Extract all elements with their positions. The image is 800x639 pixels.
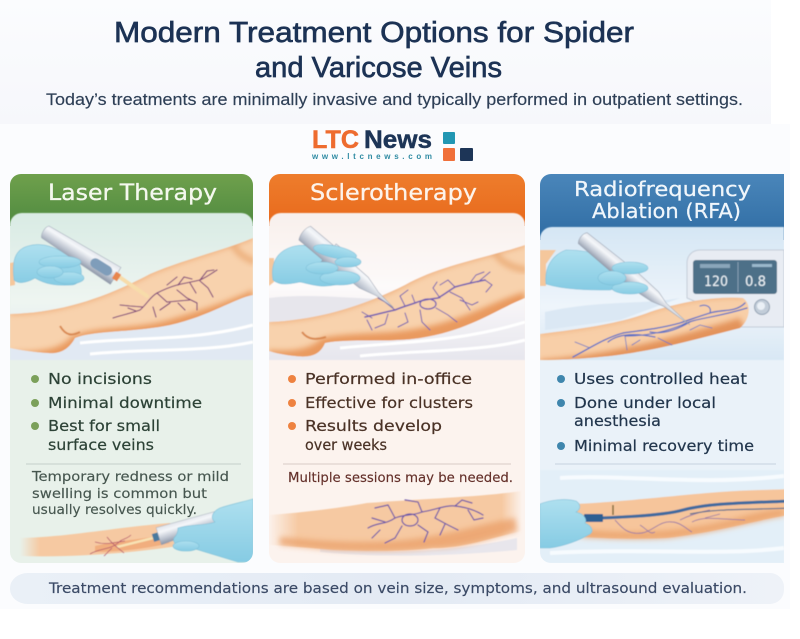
finger lobes bbox=[306, 242, 361, 285]
bullet list bbox=[31, 370, 202, 454]
subtitle: Today’s treatments are minimally invasive and typically performed in outpatient settings. bbox=[46, 91, 743, 109]
illustration: treated leg close-up bbox=[268, 491, 522, 556]
header: Radiofrequency Ablation (RFA) bbox=[540, 174, 784, 240]
syringe bbox=[298, 226, 394, 308]
header: Sclerotherapy bbox=[269, 174, 525, 226]
footer banner bbox=[10, 573, 784, 604]
bullet list bbox=[288, 370, 473, 454]
illustration: catheter in arm bbox=[540, 474, 784, 557]
title: and Varicose Veins bbox=[255, 52, 502, 84]
veins bbox=[573, 303, 747, 357]
RFA machine: 0.8 bbox=[745, 274, 766, 290]
panel: Radiofrequency Ablation (RFA) bbox=[540, 174, 790, 563]
laser beam bbox=[118, 276, 147, 296]
logo: LTC News: News bbox=[364, 126, 432, 154]
leg bbox=[10, 238, 253, 354]
illustration: injection on leg bbox=[269, 213, 528, 360]
footer banner: Treatment recommendations are based on vein size, symptoms, and ultrasound evaluation. bbox=[48, 581, 747, 597]
note: Temporary redness or mild bbox=[31, 470, 229, 485]
RF pen bbox=[578, 232, 690, 326]
bullet list: anesthesia bbox=[574, 412, 661, 430]
note: usually resolves quickly. bbox=[32, 503, 197, 518]
bullet list: Best for small bbox=[48, 417, 160, 435]
RFA machine: 120 bbox=[704, 274, 728, 290]
illustration: RFA device and arm bbox=[540, 227, 784, 372]
logo: LTC News bbox=[311, 126, 473, 161]
finger lobes bbox=[37, 256, 84, 284]
spider veins bbox=[113, 270, 217, 318]
RFA machine bbox=[687, 250, 784, 327]
gloved hand bbox=[269, 245, 347, 286]
title: Modern Treatment Options for Spider bbox=[114, 17, 634, 49]
handpiece bbox=[40, 226, 122, 285]
panel: Sclerotherapy bbox=[268, 174, 528, 563]
header: Sclerotherapy: Sclerotherapy bbox=[310, 181, 477, 206]
note: swelling is common but bbox=[32, 487, 207, 502]
close-up gloved hand bbox=[173, 499, 253, 562]
bullet list bbox=[557, 370, 754, 455]
bullet list: Done under local bbox=[574, 394, 716, 412]
bullet list: surface veins bbox=[48, 436, 154, 454]
bullet list: over weeks bbox=[305, 436, 387, 454]
bullet list: Performed in-office bbox=[305, 370, 472, 388]
arm bbox=[540, 297, 750, 361]
finger lobes bbox=[598, 262, 648, 294]
title bbox=[114, 17, 634, 84]
close-up handpiece bbox=[151, 511, 214, 546]
catheter gloved hand bbox=[540, 500, 592, 548]
illustration: laser on leg bbox=[10, 213, 256, 360]
panel: Laser Therapy bbox=[10, 174, 256, 563]
note: Multiple sessions may be needed. bbox=[288, 471, 513, 486]
logo: LTC News: www.ltcnews.com bbox=[311, 152, 432, 161]
logo: LTC News: LTC bbox=[312, 126, 359, 154]
bullet list: Uses controlled heat bbox=[574, 370, 747, 388]
header: Radiofrequency Ablation (RFA): Radiofrequency bbox=[574, 177, 751, 201]
bullet list: Minimal recovery time bbox=[574, 437, 754, 455]
bullet list: Results develop bbox=[305, 417, 442, 435]
spider veins bbox=[362, 272, 492, 330]
bullet list: Effective for clusters bbox=[305, 394, 473, 412]
header: Laser Therapy: Laser Therapy bbox=[48, 181, 217, 206]
header: Radiofrequency Ablation (RFA): Ablation (RFA) bbox=[592, 199, 741, 223]
illustration: laser close-up bbox=[20, 499, 253, 562]
bullet list: No incisions bbox=[48, 370, 152, 388]
note bbox=[31, 470, 229, 518]
leg bbox=[269, 240, 528, 360]
header: Laser Therapy bbox=[10, 174, 253, 226]
gloved hand bbox=[540, 250, 624, 290]
gloved hand bbox=[10, 245, 81, 286]
bullet list: Minimal downtime bbox=[48, 394, 202, 412]
